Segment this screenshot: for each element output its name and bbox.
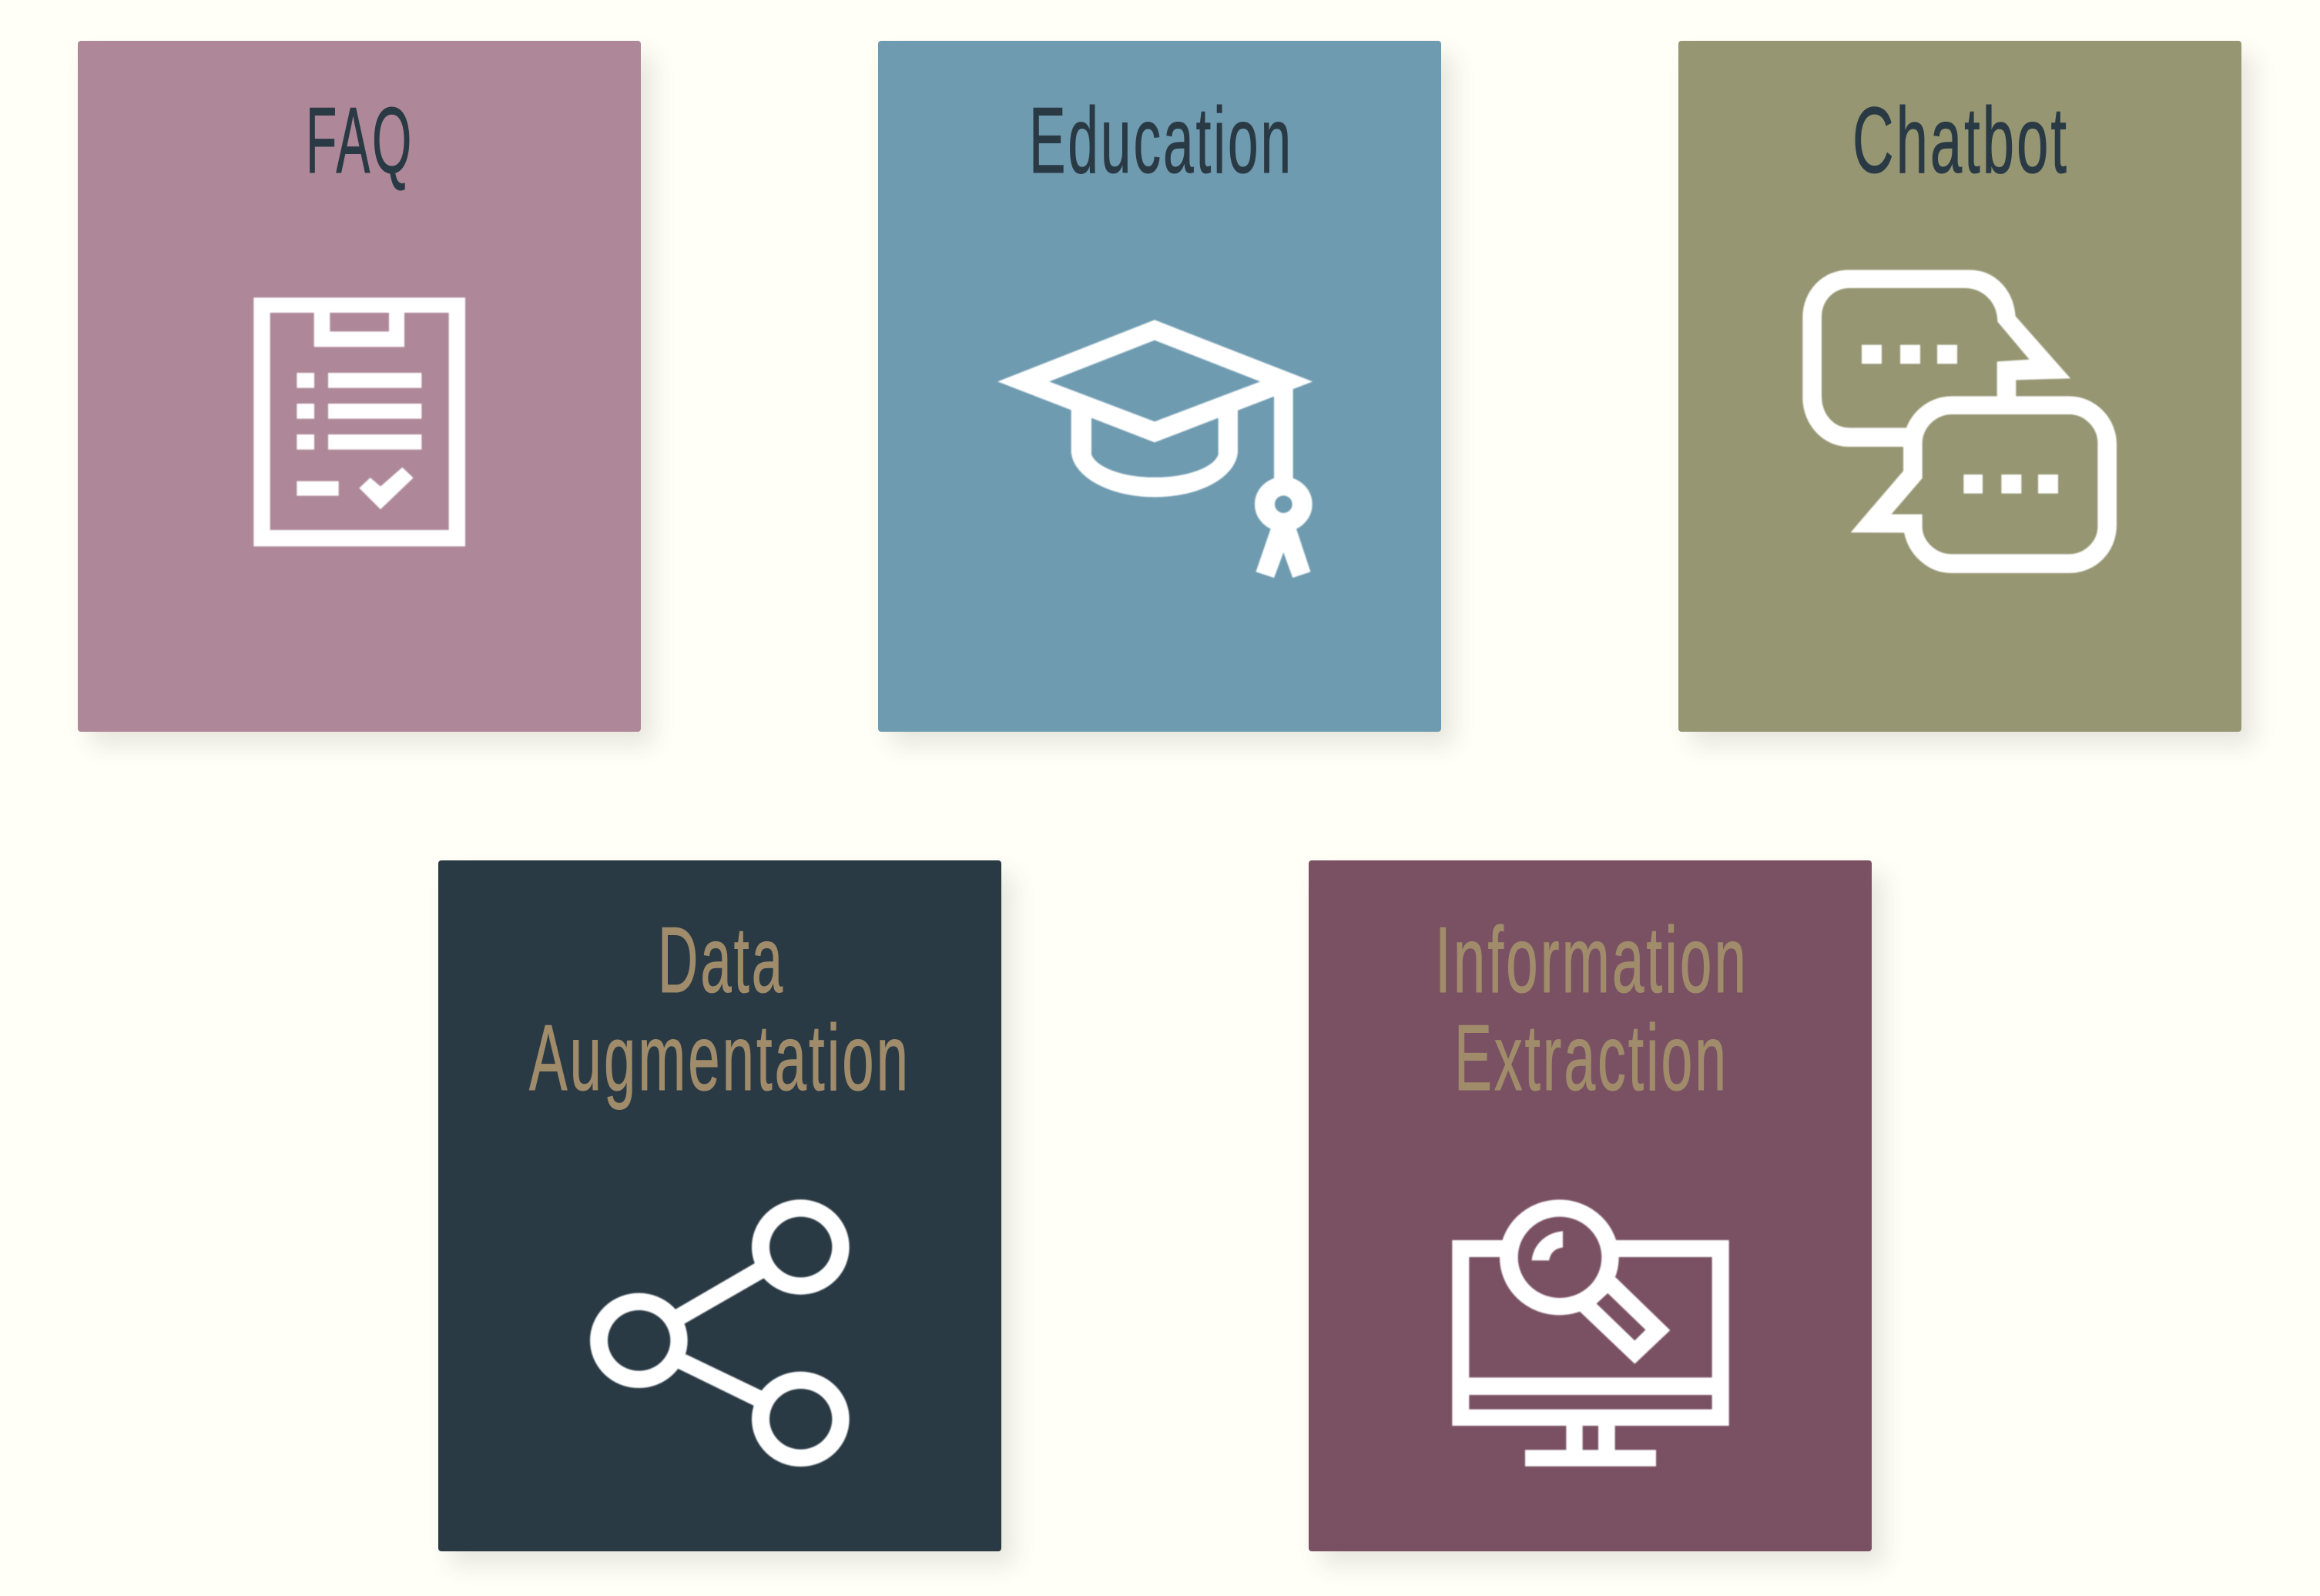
heading: FAQ: FAQ [306, 88, 414, 193]
icon: graduation cap [997, 319, 1313, 578]
icon: share nodes [589, 1199, 850, 1467]
panel: Education [878, 41, 1441, 732]
heading: Data Augmentation: Augmentation [529, 1005, 910, 1110]
heading: Information Extraction [1435, 907, 1748, 1110]
icon: clipboard checklist [253, 297, 466, 547]
heading: Education: Education [1029, 88, 1293, 193]
icon: monitor with magnifying glass [1451, 1199, 1730, 1467]
heading: Data Augmentation [528, 907, 910, 1110]
panel: Data Augmentation [438, 860, 1001, 1551]
icon: speech bubbles [1802, 269, 2117, 574]
heading: Information Extraction: Information [1435, 907, 1748, 1012]
heading: Data Augmentation: Data [658, 907, 785, 1012]
panel: FAQ [78, 41, 641, 732]
heading: Chatbot: Chatbot [1852, 88, 2069, 193]
heading: Information Extraction: Extraction [1454, 1005, 1728, 1110]
panel: Information Extraction [1309, 860, 1872, 1551]
panel: Chatbot [1678, 41, 2241, 732]
